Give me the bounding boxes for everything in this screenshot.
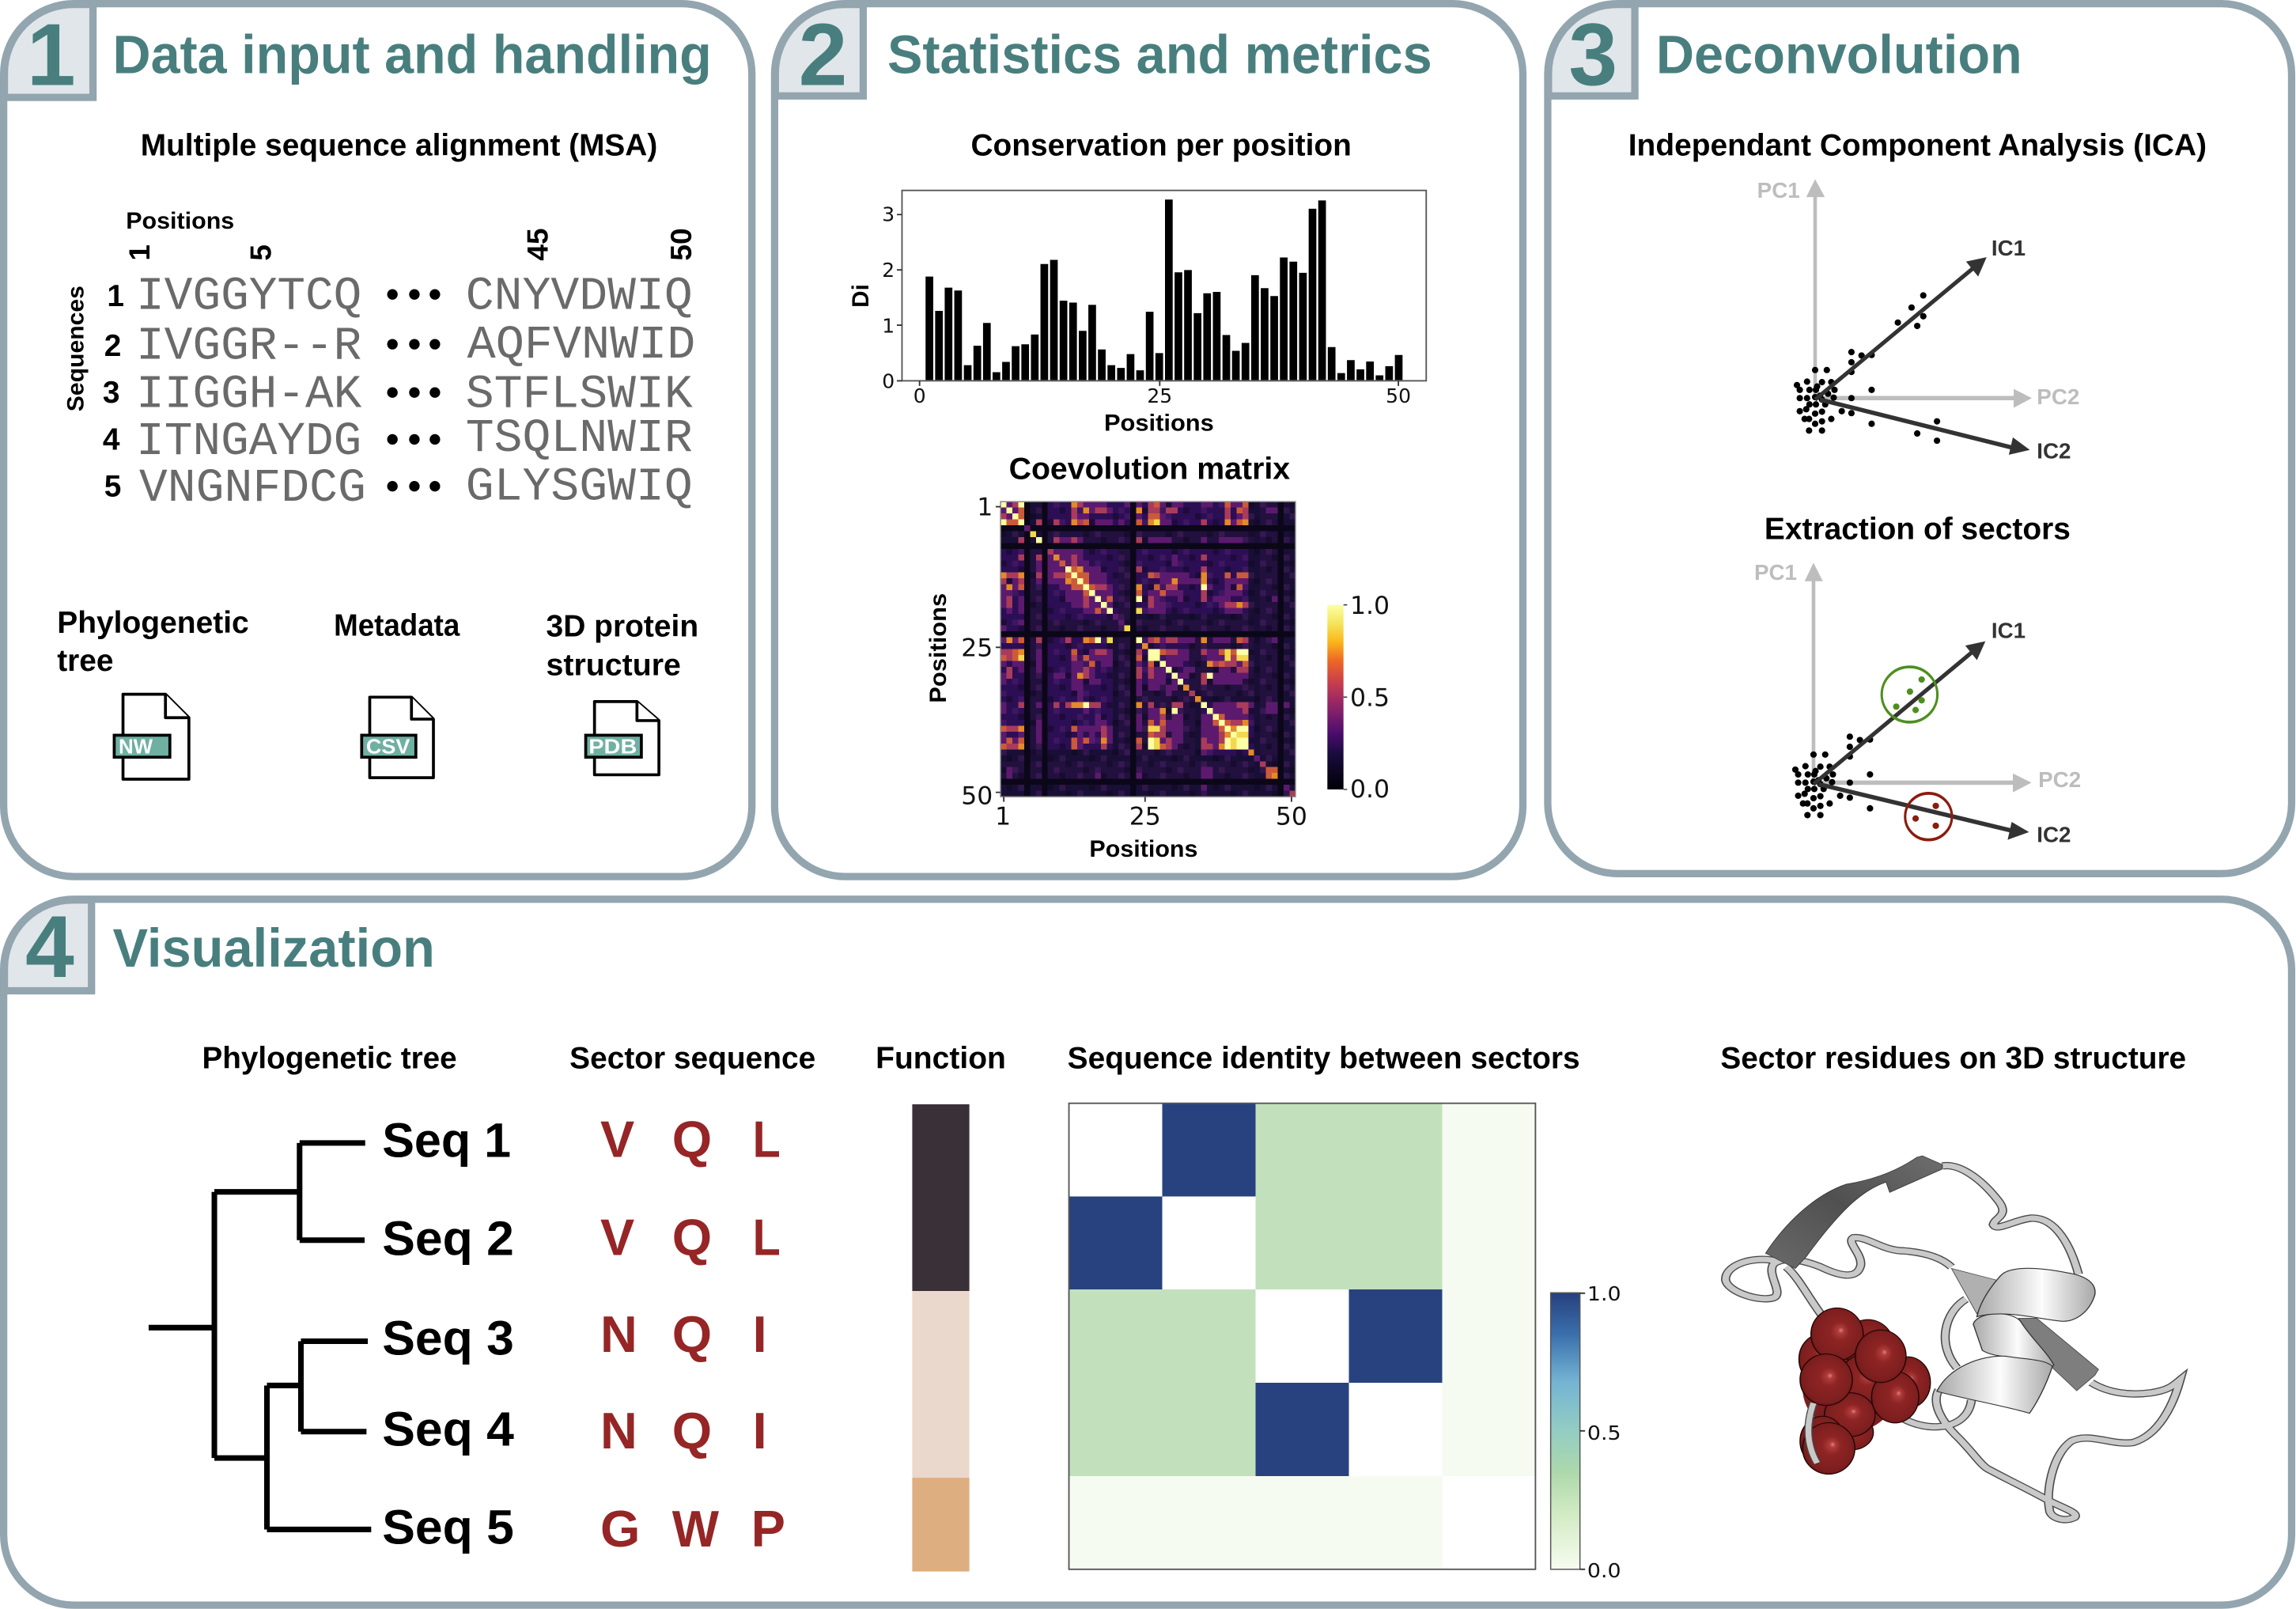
axis labels: PC1 (1754, 560, 1797, 585)
coevolution heading: Coevolution matrix (1009, 452, 1290, 486)
sector sequence letters: N (600, 1305, 637, 1363)
points (1794, 292, 1940, 444)
scatter: extraction of sectors (1754, 560, 2081, 847)
right alignment: GLYSGWIQ (466, 460, 693, 513)
phylogenetic tree label: tree (57, 644, 114, 678)
axis labels (1757, 178, 2079, 464)
sector sequence letters: Q (672, 1305, 712, 1363)
y tick labels: 25 (961, 634, 993, 662)
alpha helix (1937, 1268, 2095, 1414)
icon: CSV file (361, 697, 433, 778)
positions axis (123, 208, 698, 261)
MSA heading: Multiple sequence alignment (MSA) (141, 128, 657, 162)
x axis title: Positions (1089, 836, 1197, 862)
sector sequence letters: Q (672, 1402, 712, 1459)
dark IC axes (1815, 257, 2029, 455)
light beta strand (1951, 1269, 2098, 1391)
3D protein structure (1726, 1156, 2181, 1520)
coil over spheres (1808, 1403, 1817, 1463)
colorbar: 0.5 (1350, 683, 1390, 712)
number tab 4: 4 (25, 897, 74, 996)
positions axis: 1 (123, 244, 156, 261)
right alignment: AQFVNWID (467, 319, 695, 372)
heading: statistics: Statistics and metrics (887, 25, 1432, 85)
sequences axis: Sequences (63, 286, 89, 411)
axis labels: IC1 (1992, 618, 2026, 642)
sector sequence heading: Sector sequence (569, 1042, 815, 1076)
points (1792, 733, 1873, 818)
sectors heading: Extraction of sectors (1765, 512, 2071, 546)
colorbar: 0.0 (1587, 1559, 1621, 1582)
y tick labels: 1 (882, 314, 895, 337)
heading: visualization: Visualization (113, 918, 435, 979)
axis labels: PC2 (2038, 767, 2081, 792)
sector sequence letters: Q (672, 1111, 712, 1168)
phylogenetic tree (149, 1114, 514, 1554)
sequence labels: Seq 4 (382, 1402, 514, 1456)
axis labels: PC1 (1757, 178, 1800, 203)
MSA block (63, 208, 698, 515)
number tab 3 (1549, 5, 1635, 104)
sector sequence letters: V (600, 1209, 634, 1266)
function heading: Function (876, 1042, 1006, 1076)
coil backbone (1726, 1166, 2181, 1520)
positions axis: 5 (244, 244, 278, 261)
bar chart: conservation (848, 191, 1426, 436)
number tab 4 (5, 897, 92, 996)
axis labels: IC2 (2037, 823, 2071, 847)
x tick labels (913, 384, 1411, 407)
phylogenetic tree label: Phylogenetic (57, 606, 249, 640)
sequence labels: Seq 5 (382, 1500, 514, 1554)
grey PCA axes (1806, 180, 2032, 408)
row numbers (103, 279, 124, 504)
left alignment: ITNGAYDG (136, 415, 361, 468)
red sector (1905, 793, 1952, 840)
tree heading: Phylogenetic tree (202, 1042, 457, 1076)
sector sequence letters: I (753, 1402, 767, 1459)
axis labels: IC2 (2037, 439, 2071, 464)
y axis title: Positions (925, 593, 951, 703)
x tick labels: 50 (1386, 384, 1411, 407)
number tab 2 (775, 5, 863, 104)
y tick labels (961, 494, 993, 810)
y tick labels: 0 (882, 370, 895, 393)
matrix diagonal (1000, 505, 1296, 793)
conservation heading: Conservation per position (970, 128, 1352, 162)
sector sequence letters: P (751, 1500, 785, 1558)
colorbar: 1.0 (1350, 592, 1390, 620)
icon: CSV file: CSV (366, 736, 410, 759)
3D structure label: structure (547, 649, 681, 683)
icon: PDB file: PDB (588, 736, 637, 759)
grey PCA axes (1805, 562, 2031, 793)
left alignment: IVGGYTCQ (136, 271, 361, 324)
sector sequence letters: L (753, 1209, 781, 1266)
sector sequence letters: W (672, 1500, 720, 1558)
x axis title: Positions (1104, 410, 1214, 436)
sector sequence letters: V (600, 1111, 634, 1168)
x tick labels (995, 802, 1307, 831)
metadata label: Metadata (334, 609, 460, 643)
row numbers: 5 (104, 470, 121, 504)
row numbers: 1 (107, 279, 124, 313)
panel 1: data input and handling (4, 4, 752, 876)
positions axis: 50 (664, 228, 698, 261)
3D structure label: 3D protein (547, 609, 698, 643)
sector sequence letters: N (600, 1402, 637, 1459)
ICA heading: Independant Component Analysis (ICA) (1628, 128, 2207, 162)
panel 4: visualization (4, 897, 2291, 1605)
number tab 1 (5, 5, 93, 104)
heatmap: sequence identity (1069, 1104, 1621, 1582)
y tick labels: 50 (961, 782, 993, 810)
green sector (1882, 667, 1938, 722)
axis ticks (897, 214, 1398, 386)
axis labels (1754, 560, 2081, 847)
right alignment: CNYVDWIQ (466, 271, 693, 324)
function colour bar (912, 1104, 970, 1572)
y tick labels: 1 (977, 494, 993, 522)
axis labels: IC1 (1992, 236, 2026, 260)
sequence labels: Seq 2 (382, 1212, 514, 1266)
sequence labels: Seq 1 (382, 1114, 511, 1168)
identity heading: Sequence identity between sectors (1068, 1042, 1580, 1076)
heading: data input: Data input and handling (113, 25, 712, 85)
left alignment: IIGGH-AK (136, 369, 362, 422)
right alignment (466, 271, 695, 513)
colorbar: 0.5 (1587, 1422, 1621, 1444)
left alignment (136, 271, 366, 515)
sector sequence letters: L (753, 1111, 781, 1168)
axis ticks (996, 507, 1292, 802)
sector sequence letters: I (753, 1305, 767, 1363)
row numbers: 3 (103, 376, 120, 410)
x tick labels: 1 (995, 802, 1011, 831)
icon: PDB file (586, 702, 659, 774)
right alignment: STFLSWIK (466, 369, 693, 422)
number tab 3: 3 (1568, 5, 1617, 104)
dark beta strand (1765, 1156, 1942, 1269)
y tick labels (882, 203, 895, 393)
heading: deconvolution: Deconvolution (1656, 25, 2022, 85)
x tick labels: 25 (1147, 384, 1172, 407)
scatter: ICA axes (1757, 178, 2079, 464)
icon: NW file: NW (119, 736, 153, 759)
structure heading: Sector residues on 3D structure (1720, 1042, 2186, 1076)
y axis title: Di (848, 284, 874, 308)
x tick labels: 50 (1276, 802, 1307, 831)
sector sequence letters: G (600, 1500, 640, 1558)
dark IC axes (1814, 642, 2029, 840)
x tick labels: 25 (1129, 802, 1161, 831)
colorbar (1551, 1282, 1621, 1582)
number tab 2: 2 (799, 5, 847, 104)
sequence labels (382, 1114, 514, 1554)
panel 3: deconvolution (1548, 4, 2291, 873)
positions axis: 45 (520, 228, 554, 261)
ellipsis dots (388, 289, 441, 491)
number tab 1: 1 (27, 5, 76, 104)
x tick labels: 0 (913, 384, 926, 407)
sector sequence letters (600, 1111, 785, 1558)
icon: NW file (114, 695, 189, 779)
colorbar: 0.0 (1350, 775, 1390, 804)
colorbar (1327, 592, 1390, 804)
axis labels: PC2 (2037, 384, 2079, 409)
colorbar: 1.0 (1587, 1282, 1621, 1305)
positions axis: Positions (126, 208, 234, 234)
y tick labels: 2 (882, 259, 895, 282)
sequence labels: Seq 3 (382, 1312, 514, 1365)
sector sequence letters: Q (672, 1209, 712, 1266)
y tick labels: 3 (882, 203, 895, 226)
left alignment: VNGNFDCG (139, 462, 366, 515)
row numbers: 4 (103, 422, 120, 456)
panel 2: statistics and metrics (774, 4, 1522, 876)
row numbers: 2 (104, 329, 121, 363)
left alignment: IVGGR--R (136, 320, 361, 373)
right alignment: TSQLNWIR (466, 412, 693, 465)
red sector spheres (1799, 1308, 1931, 1475)
bars (929, 199, 1398, 380)
heatmap: coevolution matrix (925, 494, 1390, 862)
